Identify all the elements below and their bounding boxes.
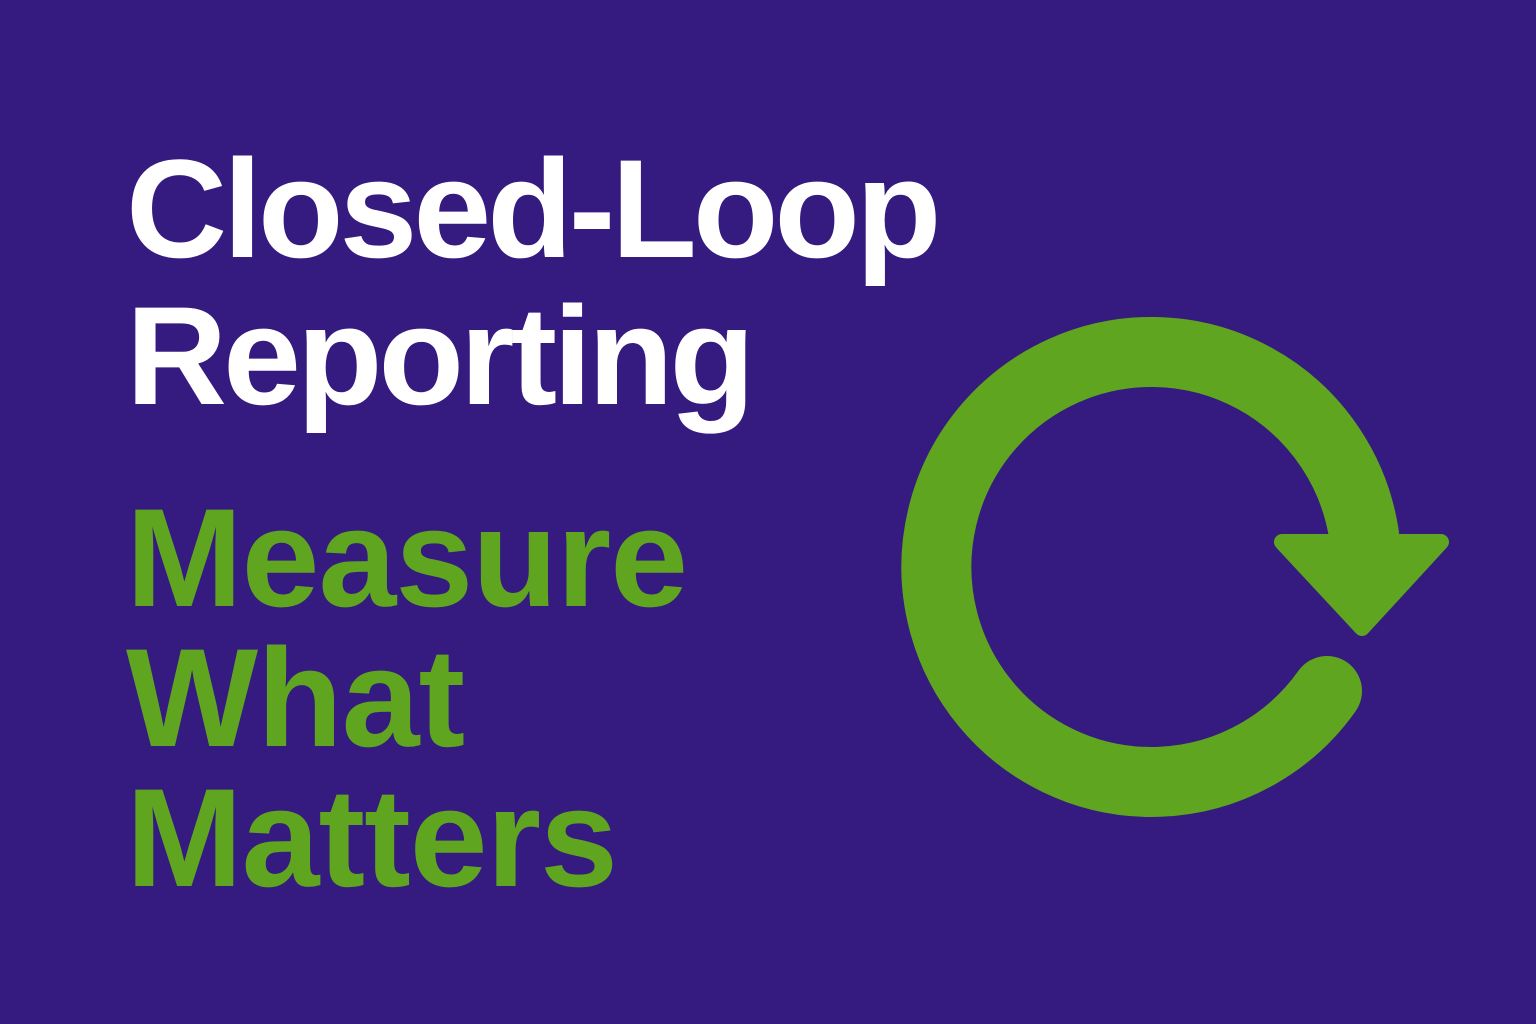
- subtitle: Measure What Matters: Matters: [126, 759, 617, 916]
- subtitle: Measure What Matters: Measure: [126, 479, 687, 636]
- title: Reporting: [126, 277, 751, 434]
- title: Closed-Loop: [126, 130, 937, 287]
- subtitle: Measure What Matters: What: [126, 619, 464, 776]
- title: [126, 130, 937, 434]
- subtitle: Measure What Matters: [126, 479, 687, 916]
